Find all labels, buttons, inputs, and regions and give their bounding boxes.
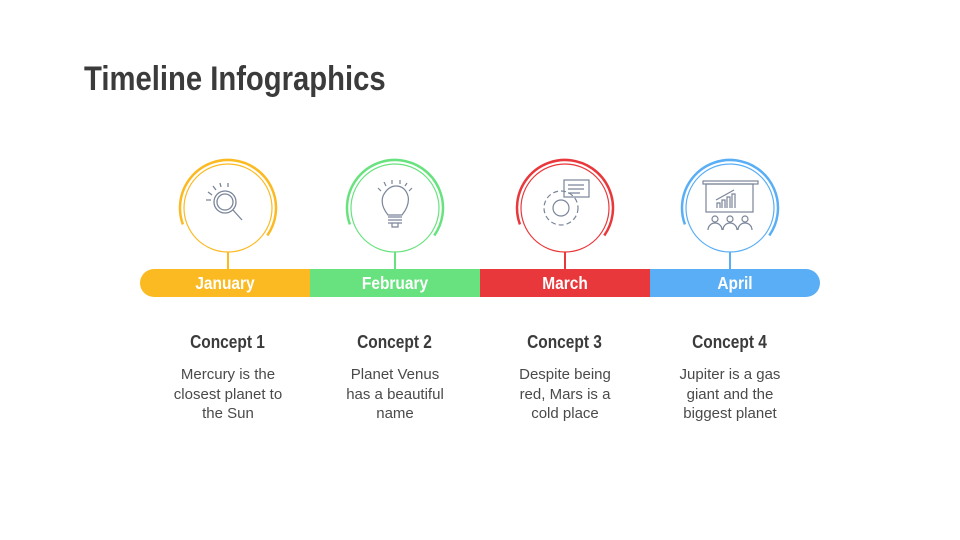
milestone 2 circle: bulb bbox=[347, 160, 443, 269]
concept 3 text: Despite being red, Mars is a cold place bbox=[519, 366, 611, 422]
timeline bar: April bbox=[717, 273, 753, 293]
concept 4 heading: Concept 4 bbox=[693, 332, 767, 352]
timeline bar: January bbox=[195, 273, 255, 293]
concept 3 heading: Concept 3 bbox=[528, 332, 602, 352]
concept 4 text: Jupiter is a gas giant and the biggest planet bbox=[680, 366, 780, 422]
milestone 1 circle: magnifier bbox=[180, 160, 276, 269]
concept 2 text: Planet Venus has a beautiful name bbox=[346, 366, 444, 422]
timeline bar: March bbox=[542, 273, 588, 293]
concept 1 heading: Concept 1 bbox=[191, 332, 265, 352]
milestone 4 circle: presentation bbox=[682, 160, 778, 269]
concept 1 text: Mercury is the closest planet to the Sun bbox=[174, 366, 282, 422]
concept 2 heading: Concept 2 bbox=[358, 332, 432, 352]
timeline bar bbox=[140, 269, 820, 297]
title: Timeline Infographics bbox=[84, 60, 386, 98]
milestone 3 circle: gear bbox=[517, 160, 613, 269]
timeline bar: February bbox=[362, 273, 429, 293]
